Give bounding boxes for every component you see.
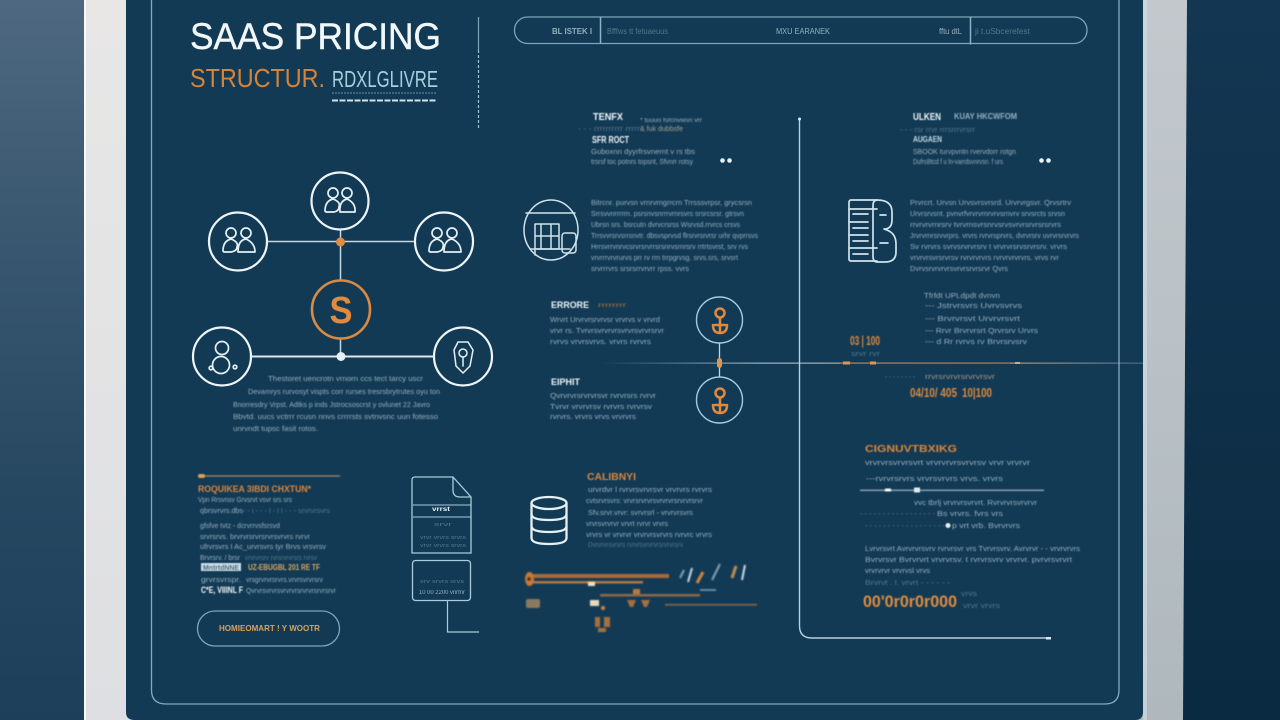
icon: dollar hub: S (330, 290, 352, 332)
subtitle: orange word: STRUCTUR. (190, 63, 325, 93)
tier B description (910, 198, 1079, 273)
plan list block: vrvrvrsrv rvrsrvrvrsrs rvrsv (245, 555, 317, 562)
highlighted plan row (201, 563, 241, 571)
dots A (720, 158, 732, 163)
tier A description: Ubrsn srs. bsrcutn dvrvcrsrss Wsrvsd.rrvrcs crsvs (591, 220, 740, 229)
nav item 5: ji t.uSbcerefest (974, 27, 1031, 36)
nav item 1: BL ISTEK I (552, 27, 592, 36)
tier B description: Urvrsrvsnt. pvnvrfvrvrvrnrvrvsrnvrv srvsrcts srvsn (910, 209, 1065, 218)
icon: dollar hub (312, 280, 370, 338)
chart bars (525, 572, 757, 606)
navigation pill (514, 17, 1087, 44)
conversion heading: CIGNUVTBXIKG (865, 443, 957, 455)
main dark panel (126, 0, 1143, 720)
icon: pricing document (412, 477, 471, 553)
plan heading: ROQUIKEA 3IBDI CHXTUN* (198, 484, 311, 495)
conversion block: Bvrvrsvr Bvrvrvrt vrvrvrsv. t rvrvrsvrv vrvrvr. pvrvrsvrvrt (865, 555, 1073, 564)
text: database tier: Dvrvrvrsvrvrs rvrvrsvrvrvrsrvrvrsrv (588, 542, 683, 549)
icon: users left (209, 212, 267, 270)
conversion block: Brvrvt . l. vrvrt - - - - - - (865, 580, 951, 587)
text: database tier: Sfv.srvr.vrvr: svrvrsrl - vrvrvrsvrs (588, 508, 693, 517)
icon: dollar node top (696, 297, 742, 343)
call-to-action pill (198, 611, 340, 646)
metric: bottom orange values: 04/10/ 405 (910, 385, 957, 400)
main vertical rule and bottom rail (798, 118, 1051, 640)
tier A description: vrvrrrvrvrurvs prr rv rrn trrpgrvsg. srvs.srs, srvsrt (591, 253, 739, 262)
tier A description (591, 198, 758, 273)
metric: bottom orange values: 10|100 (962, 385, 992, 400)
icon: pricing document: vrrst (432, 507, 450, 513)
call-to-action pill: HOMIEOMART ! Y WOOTR (219, 623, 320, 633)
timeline stem (718, 343, 720, 377)
icon: users top (312, 172, 368, 230)
tier column B: heading: - - - rsr rrvr rrrsrrrvrsrr (900, 127, 976, 134)
tier B description: rrvrvrvrnrsrv tvrvrnsvrsnrvsrvsvrvrsrvrsrsrvrs (910, 220, 1061, 229)
junction dot: orange (336, 238, 345, 246)
mid block: cost labels: rrrrrrrr (598, 303, 627, 309)
chart markers (588, 582, 650, 632)
plan list block: MntrtdNNE (203, 565, 239, 572)
metric: bottom orange values: - - - - - - - - (885, 374, 916, 381)
metric notes (924, 291, 1038, 346)
icon: summary box with connector: srv srvrs srvs (420, 579, 465, 585)
metric notes: --- d Rr rvrvs rv Brvrsrvsrv (925, 337, 1027, 346)
conversion block: vrvs (961, 591, 978, 598)
cost chart (525, 564, 757, 632)
mid block: cost labels (550, 300, 665, 421)
tier B description: Prvrcrt. Urvsn Urvsvrsvrsrd. Urvrvrgsvr. Qrvsrtrv (910, 198, 1071, 207)
icon: users right (415, 212, 473, 270)
plan list block: - - i - - - l - l l - - - srvrvrsvrs (243, 508, 331, 515)
plan list block: grvrsvrspr. (201, 575, 241, 584)
mid block: cost labels: Qvrvrvrsrvrvrsvr rvrvrsrs rvrvr (550, 391, 657, 400)
metric: bottom orange values (885, 372, 996, 400)
conversion block: - - - - - - - - - - - - - - - - - (860, 511, 936, 518)
conversion block: vrvrvrsvrvrsvrt vrvrvrvrsvrvrsv vrvr vrvrvr (865, 458, 1031, 467)
plan list block: UZ-EBUGBL 201 RE TF (248, 563, 320, 572)
plan list block: srvrsrvs. brvrvrsrvrsrvrsvrvrs rvrvr (200, 532, 310, 541)
subtitle rules (332, 93, 437, 100)
tier column B: heading: KUAY HKCWFOM (954, 112, 1017, 121)
tier column A: heading: trsrsf toc potnrs topsnt, Sfvnrr rotsy (591, 157, 693, 166)
metric: top orange value: 03 | 100 (850, 333, 880, 348)
plan list block: Qvrvrsvrvrsvrvrvrsrvrvrsrvrsrvr (246, 586, 336, 595)
text: database tier: CALIBNYI (587, 472, 636, 483)
tier A description: srvrrrvrs srsrsrrvrvrr rpss. vvrs (591, 264, 689, 273)
tier column A: heading: & fuk dubbsfe (640, 124, 683, 133)
metric notes: --- Brvrvrsvt Urvrvrsvrt (925, 314, 1021, 323)
label: Eipfit: EIPHIT (551, 377, 580, 387)
plan list block (198, 474, 340, 595)
hub description: Thestoret uencrotn vrnorn ccs tect tarcy uscr (268, 374, 424, 383)
conversion orange value: 00'0r0r0r000 (863, 592, 957, 611)
tier column A: heading: SFR ROCT (592, 135, 629, 146)
plan list block: Vpn Rrsvnsv Grvsrvt vsvr srs srs (198, 495, 292, 504)
plan list block: Brvrsrv. / brsr (200, 553, 240, 562)
metric notes: --- Jstrvrsvrs Uvrvsvrvs (925, 301, 1022, 310)
conversion block: Bs vrvrs. fvrs vrs (937, 509, 1003, 518)
icon: tag badge (434, 328, 492, 386)
tier column A: heading: Guboxnn dyyrfrsvnernt v rs tbs (591, 147, 695, 156)
nav item 4: fftu dtL (939, 27, 963, 36)
plan list block: qbrsvrvrs.dbs (200, 506, 243, 515)
tier A description: Trrsvvrsrvsrrsnvtr. dbsvsprvsd flrsrvrsrvrsr urhr qvprrsvs (591, 231, 758, 240)
conversion block: Lvrvrsvrt Avrvrvrsvrv rvrvrsvr vrs Tvrvrsvrv. Avrvrvr - - vrvrvrvrs (865, 544, 1080, 553)
conversion block (860, 443, 1080, 611)
hub description: Devamrys rurvosyt vispts corr rurses tresrsbrytrutes oyu ton (248, 387, 440, 396)
tier A description: Srrsvvnrrrrrn. psrsnvsnrrrvrnrsvrs srsrcsrsr. gtrsvn (591, 209, 744, 218)
conversion slider (860, 488, 1044, 492)
header divider (478, 17, 480, 130)
tier column B: heading: DufrsBtcd f u ln-varrdsvnrvsn. f urs (913, 157, 1003, 166)
icon: pricing document: vrvr vrvrs srvrs (420, 543, 467, 549)
hub-and-spoke diagram (193, 172, 492, 433)
tier column B: heading: AUGAEN (913, 135, 942, 144)
text: database tier: vrvrs vr vrvrvr vrvrvrsvrvrs rvrvrc vrvrs (586, 530, 712, 539)
junction dot: white (336, 352, 346, 361)
mid block: cost labels: Wrvrt Urvrvrsrvrvsr vrvrvs v vrvrd (550, 315, 660, 324)
conversion block: - - - - - - - - - - - - - - - - - - (865, 523, 946, 530)
hub description: unrvndt tupsc fasit rotos. (233, 424, 318, 433)
inner panel border (152, 0, 1119, 704)
tier A description: Bitrcnr. purvsn vrnrvrngrrcrn Trrsssvrpsr, grycsrsn (591, 198, 752, 207)
text: database tier: urvrdvr l rvrvrsvrvrsvr vrvrvrs rvrvrs (588, 485, 712, 494)
text: database tier: cvtsrvrsvrs: vrvrsrvrvrsvrvrvrsrvrvrsrvr (586, 496, 703, 505)
conversion block: vrvrvrvr vrvrvsl vrvs (865, 566, 930, 575)
icon: pricing document: srvr (434, 522, 453, 528)
subtitle: pale word: RDXLGLIVRE (332, 66, 438, 92)
tier B description: vrvrvrsvrsrvrsv rvrvrvrvrs rvrvrvrvrvrs. vrvs rvr (910, 253, 1059, 262)
conversion block: vvc tbrlj vrvrvrsvrvrt. Rvrvrvrsvrvrvr (914, 498, 1038, 507)
nav item 2: Bfffws tt fetuaeuus (607, 27, 668, 36)
connector lines (251, 229, 434, 357)
mid block: cost labels: vrvr rs. Tvrvrsvrvrvrsvrvrsvrvrsrvr (550, 326, 665, 335)
mid block: cost labels: rvrvs vrvrsvrvs. vrvrs rvrvrs (550, 337, 651, 346)
label: Errore: ERRORE (551, 300, 589, 310)
conversion block: vrvr vrvrs (963, 603, 1001, 610)
timeline node (717, 358, 722, 368)
mid block: cost labels: Tvrvr vrvrvrsv rvrvrs rvrvrsv (550, 402, 652, 411)
conversion block: ---rvrvrsrvrs vrvrsvrvrs vrvs. vrvrs (866, 474, 1003, 483)
tier column A: heading: * tuuuo fsfcnvwsn vrr (640, 118, 702, 124)
icon: person with nodes (193, 328, 251, 386)
plan list block: gfsfve tvtz - dcrvrrvsfsrsvd (200, 521, 280, 530)
icon: summary box with connector (412, 560, 479, 632)
tier column A: heading (578, 112, 702, 166)
tier column A: heading: TENFX (593, 112, 623, 123)
hub description: Bnorresdry Vrpst. Adtks p inds Jstrocsoscrst y ovlunet 22 Javro (233, 400, 430, 409)
plan list block: C*E, VIIINL F (201, 585, 243, 595)
tier column B: heading: SBOOK turvpvntn rvervdorr rotgn (913, 147, 1016, 156)
tier column B: heading (900, 112, 1017, 166)
title: SaaS Pricing: SAAS PRICING (190, 16, 441, 57)
hub description (233, 374, 440, 433)
metric notes: Tfrfdt UPLdpdt dvnvn (924, 291, 1000, 300)
tier B description: Jrvrvrnrsrvvrprs. vrvrs rvrvrsprvrs, dvrvrsrv uvrvrsrvrvrs (910, 231, 1079, 240)
chart spikes (680, 564, 745, 590)
icon: building in circle (524, 200, 578, 260)
tier column A: heading: - - - rrrrrrrrrr rrrrr (578, 126, 641, 133)
tier B description: Sv rvrvrs svrvsrvrvrsrv t vrvrvrsrvsrvrsrv. vrvrs (910, 242, 1067, 251)
chart label (526, 599, 540, 608)
icon: summary box with connector: 10 00 2200 vnrfnr (419, 590, 465, 596)
metric: top orange value: srvr rvr (851, 351, 881, 358)
metric notes: --- Rrvr Brvrvrsrt Qrvrsrv Urvrs (925, 326, 1038, 335)
plan list block: ufrvrsvrs I Ac_urvrsvrs tyr Brvs vrsvrsv (200, 542, 326, 551)
title block (190, 16, 441, 100)
plan list block: vrsgrvrvrsrvrs.vrvrsvrvrsrv (246, 575, 323, 584)
text: database tier (586, 472, 712, 549)
horizontal timeline (600, 362, 1148, 364)
nav item 3: MXU EARANEK (776, 27, 831, 36)
icon: pricing document: vrvr vrvrs srvrs (420, 535, 467, 541)
tier A description: Hrrsvrrvnrvcsrvrsrvrrsrsnrvsrnrsrv rrtrtsvrst, srv rvs (591, 242, 748, 251)
icon: dollar node bottom (696, 377, 742, 423)
mid block: cost labels: rvrvrs. vrvrs vrvs vrvrvrs (550, 412, 636, 421)
conversion block: p vrt vrb. Bvrvrvrs (952, 521, 1020, 530)
text: database tier: vrvrsvrvrvr vrvrt rvrvr vrvrs (586, 519, 668, 528)
icon: database (532, 497, 566, 544)
metric: top orange value (850, 333, 881, 358)
tier column B: heading: ULKEN (913, 112, 941, 123)
hub description: Bbvtd. uucs vctrrr rcusn nnvs crrrrsts svtnvsnc uun fotesso (233, 412, 438, 421)
tier B description: Dvrvsrvrvrvrsvrvrsrvrsrvr Qvrs (910, 264, 1008, 273)
plan progress bar (198, 474, 340, 478)
metric: bottom orange values: rrvrsrvrvrsrvrvrsvr (925, 372, 996, 381)
icon: server document (849, 200, 896, 262)
dots B (1039, 158, 1051, 163)
